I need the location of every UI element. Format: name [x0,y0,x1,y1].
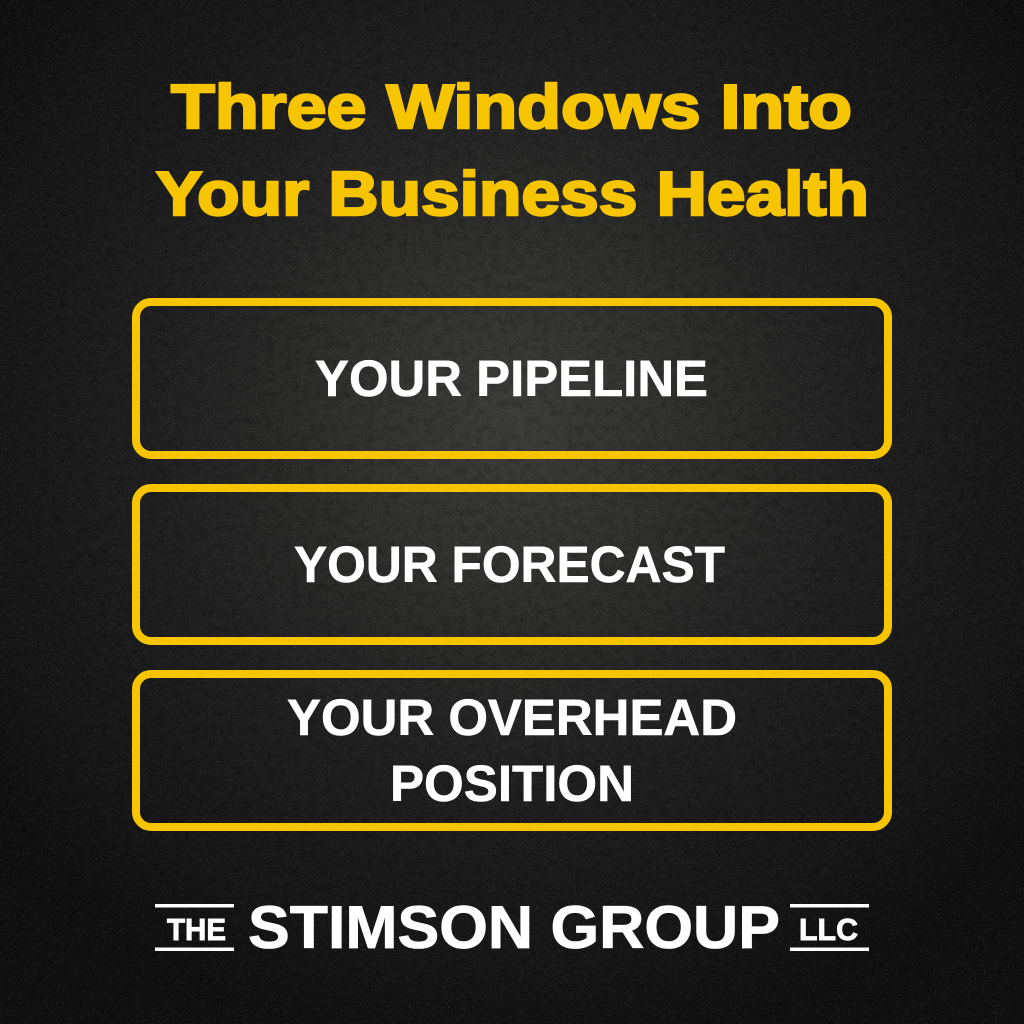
panel: your overhead position: YOUR OVERHEAD [287,689,737,746]
panel: your pipeline [136,302,888,455]
panel: your forecast: YOUR FORECAST [294,536,725,593]
panel: your pipeline: YOUR PIPELINE [315,350,708,407]
panel: your overhead position [136,674,888,827]
logo: the stimson group llc: STIMSON GROUP [248,894,780,961]
panel: your forecast [136,488,888,641]
title: Three Windows Into [171,73,852,142]
logo: the stimson group llc: LLC [799,912,858,947]
logo: the stimson group llc: THE [167,912,226,947]
panel: your overhead position: POSITION [390,755,634,812]
title [156,73,869,229]
title: Your Business Health [156,160,869,229]
